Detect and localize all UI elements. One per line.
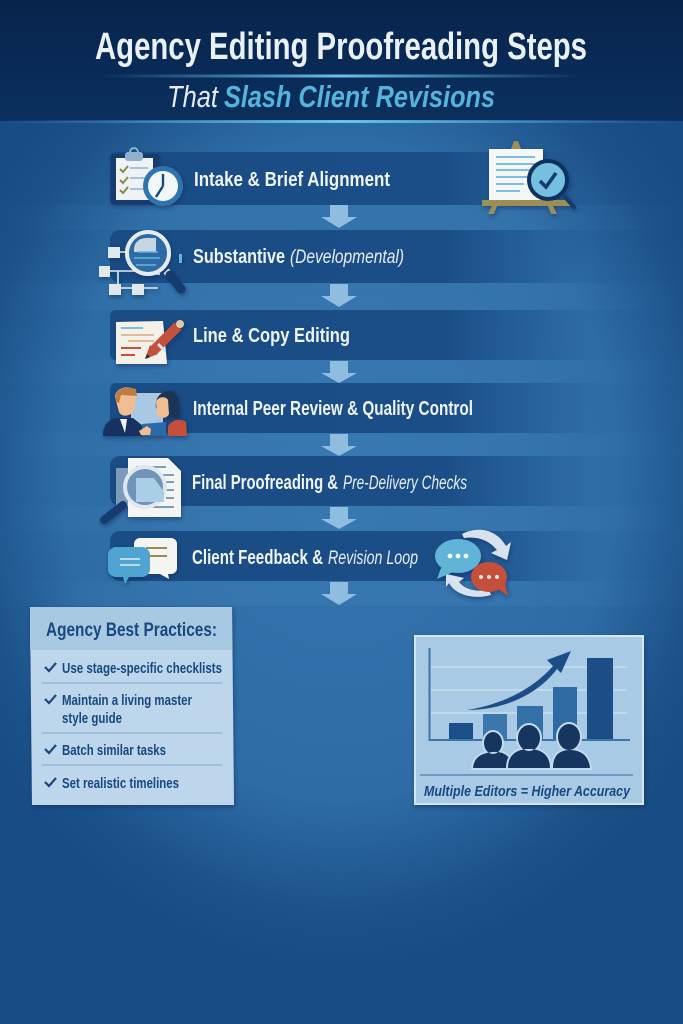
icon: two speech bubbles bbox=[108, 538, 177, 584]
trend arrow bbox=[467, 651, 571, 710]
step 5: final proofreading bbox=[104, 456, 590, 520]
step label: Pre-Delivery Checks bbox=[343, 473, 467, 494]
checklist item: Set realistic timelines bbox=[62, 775, 179, 792]
header banner bbox=[0, 0, 683, 123]
subtitle: That bbox=[167, 79, 219, 114]
checklist item: Maintain a living master bbox=[62, 692, 192, 709]
icon: clipboard and clock bbox=[111, 148, 183, 206]
step 2: substantive bbox=[99, 230, 590, 295]
subtitle bbox=[167, 79, 495, 114]
checklist item bbox=[45, 692, 192, 727]
step label: Internal Peer Review & Quality Control bbox=[193, 398, 473, 420]
step 6: client feedback bbox=[108, 530, 590, 597]
arrow 4 bbox=[321, 434, 357, 456]
icon: flowchart under magnifier bbox=[99, 232, 182, 295]
checklist item: Batch similar tasks bbox=[62, 742, 166, 759]
step label: Revision Loop bbox=[328, 548, 418, 569]
arrow 6 bbox=[321, 582, 357, 605]
step label: Client Feedback & bbox=[192, 547, 323, 569]
checklist item: Use stage-specific checklists bbox=[62, 660, 222, 677]
icon: revision loop chat bubbles bbox=[435, 530, 511, 597]
step label: Line & Copy Editing bbox=[193, 325, 350, 347]
title divider bbox=[100, 74, 582, 78]
panel heading: Agency Best Practices: bbox=[46, 620, 217, 641]
bar chart bbox=[430, 648, 630, 740]
icon: two colleagues bbox=[103, 387, 187, 436]
arrow 1 bbox=[321, 205, 357, 228]
panel: accuracy chart bbox=[415, 636, 643, 804]
panel heading bbox=[30, 607, 232, 650]
step 1: intake bbox=[110, 141, 590, 214]
icon: document with magnifier bbox=[104, 458, 181, 520]
light connector strips bbox=[0, 205, 683, 606]
subtitle: Slash Client Revisions bbox=[224, 79, 495, 114]
step 2: substantive: (Developmental) bbox=[290, 247, 404, 268]
step label: Intake & Brief Alignment bbox=[194, 169, 390, 191]
step 4: peer review bbox=[103, 383, 590, 436]
arrow 5 bbox=[321, 507, 357, 529]
arrow 2 bbox=[321, 284, 357, 307]
icon: document on easel with magnifier bbox=[482, 141, 574, 214]
icon: page with red pen bbox=[116, 320, 184, 364]
arrow 3 bbox=[321, 361, 357, 383]
checklist item bbox=[45, 742, 166, 759]
step 3: line and copy editing bbox=[110, 310, 590, 364]
step label: Substantive bbox=[193, 246, 285, 268]
checklist item: style guide bbox=[62, 710, 122, 727]
panel: agency best practices bbox=[30, 607, 234, 805]
icon: three editors bbox=[473, 724, 590, 768]
step label: Final Proofreading & bbox=[192, 472, 338, 494]
chart caption: Multiple Editors = Higher Accuracy bbox=[424, 783, 631, 800]
checklist item bbox=[45, 775, 179, 792]
